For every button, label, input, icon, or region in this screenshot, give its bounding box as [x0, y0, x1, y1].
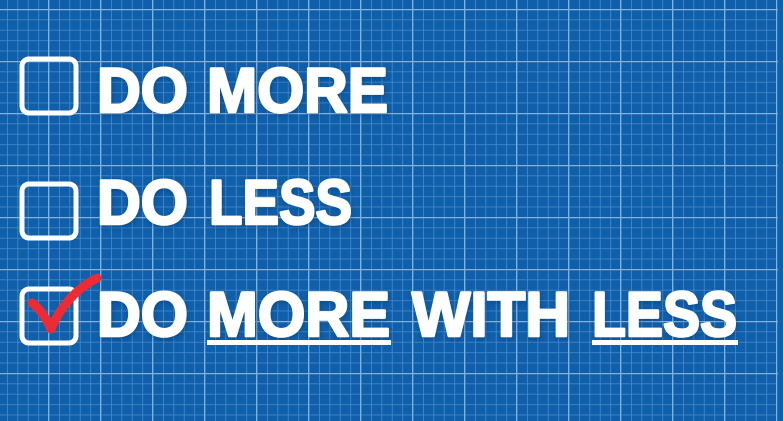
checklist item: do more with less — [22, 278, 738, 350]
icon: red check mark — [32, 278, 97, 329]
empty checkbox 1 — [22, 59, 76, 113]
checked checkbox — [22, 289, 76, 343]
empty checkbox 2 — [22, 184, 76, 238]
heading: do more: DO — [97, 56, 188, 126]
heading: do more with less: MORE — [207, 280, 390, 350]
heading: do more with less: DO — [97, 280, 188, 350]
heading: do more with less: LESS — [592, 280, 737, 350]
checklist item: do less — [22, 168, 352, 238]
underline: more — [207, 340, 391, 345]
heading: do more: MORE — [207, 56, 388, 126]
heading: do more with less — [97, 280, 737, 350]
heading: do less: LESS — [209, 168, 352, 238]
heading: do less — [97, 168, 352, 238]
heading: do more with less: WITH — [412, 280, 570, 350]
heading: do less: DO — [97, 168, 188, 238]
underline: less — [592, 340, 738, 345]
checklist item: do more — [22, 56, 388, 126]
heading: do more — [97, 56, 388, 126]
